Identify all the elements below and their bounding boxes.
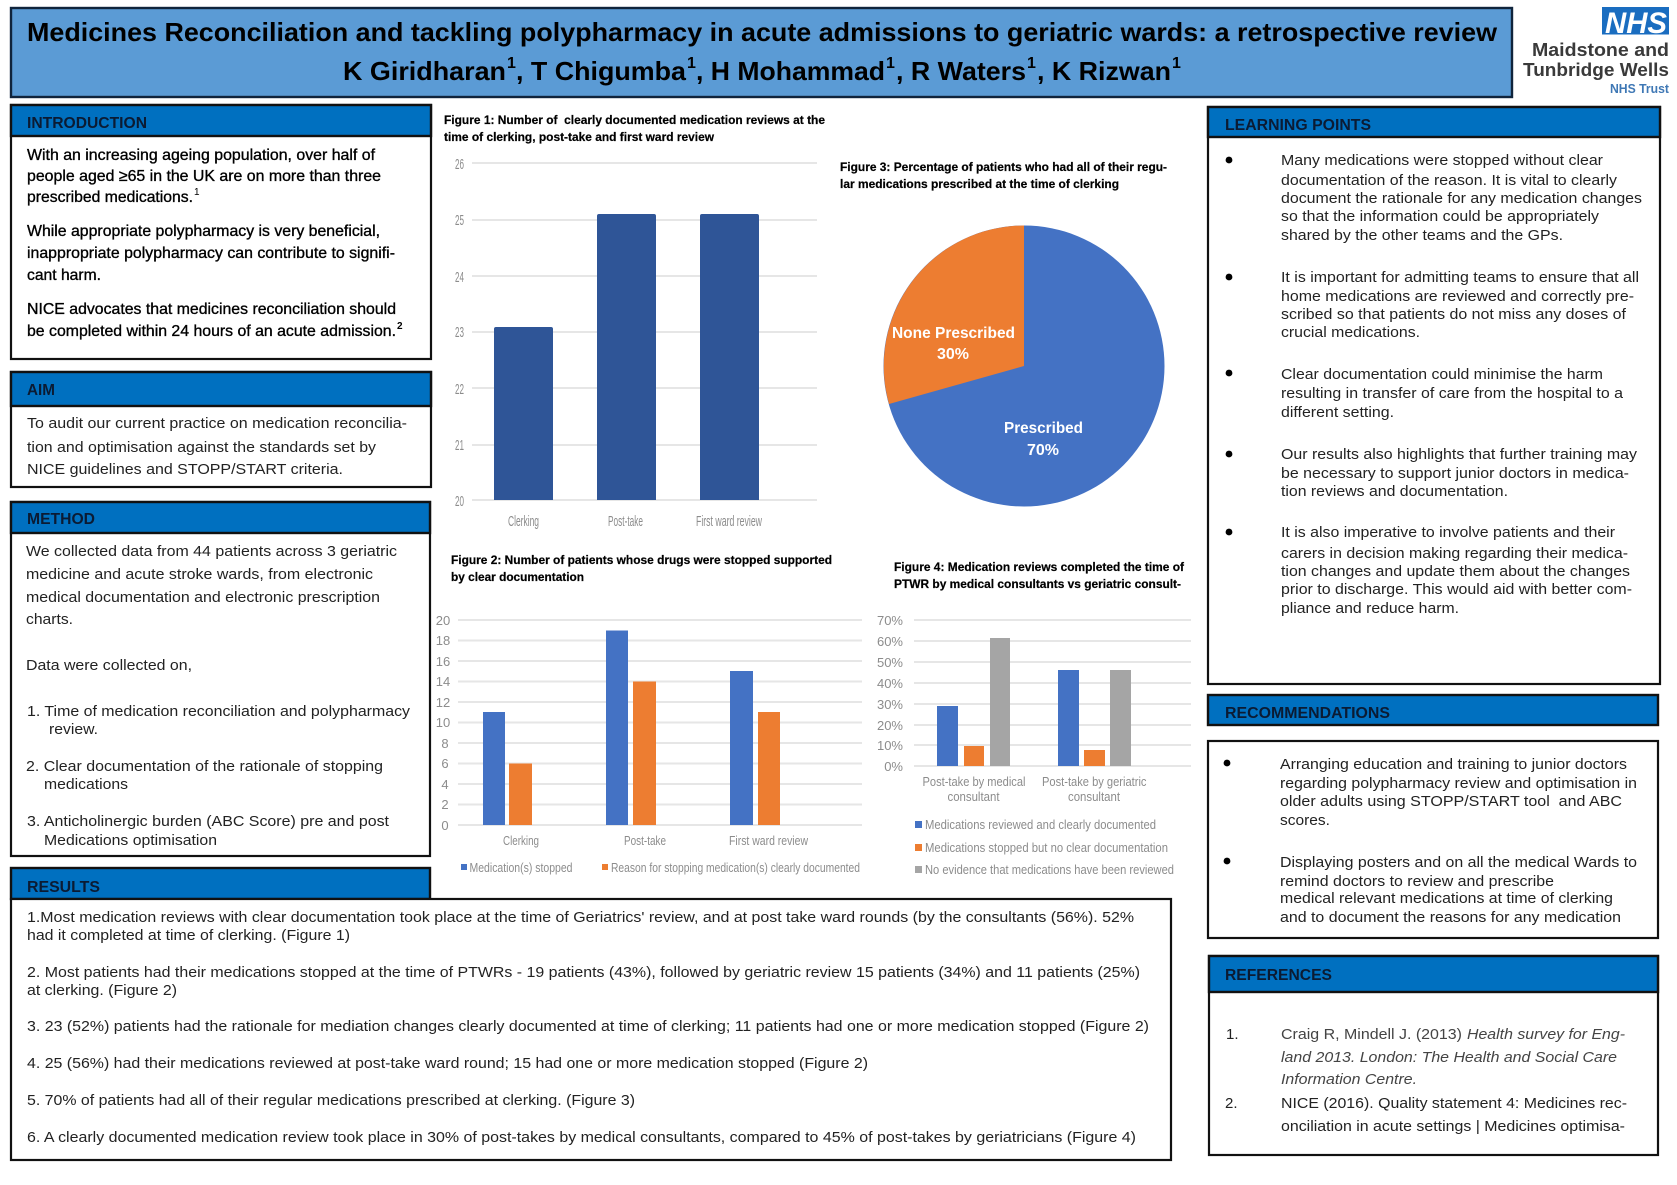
text block: method: 2. Clear documentation of the rationale of stopping: [26, 758, 383, 775]
heading: method: METHOD: [27, 511, 95, 528]
panel: recommendations: [1208, 741, 1658, 938]
legend: figure 2: Medication(s) stopped: [470, 860, 572, 875]
panel: results: [11, 868, 1171, 1160]
bar chart: figure 1: 25: [455, 212, 464, 229]
authors: 1: [687, 55, 696, 72]
text block: introduction: people aged ≥65 in the UK are on more than three: [27, 168, 381, 185]
bar chart: figure 2: 20: [436, 613, 450, 628]
pie chart: figure 3: [884, 226, 1164, 506]
text block: references: [1225, 1026, 1627, 1135]
bullet list: learning points: pliance and reduce harm.: [1281, 600, 1459, 617]
bar chart: figure 2: 14: [436, 674, 450, 689]
bar chart: figure 2: First ward review: [729, 833, 808, 848]
bullet list: learning points: prior to discharge. This would aid with better com-: [1281, 581, 1632, 598]
bar chart: figure 2: Post-take: [624, 833, 666, 848]
title: Medicines Reconciliation and tackling polypharmacy in acute admissions to geriatric wards: a retrospective review: [27, 17, 1498, 47]
bar chart: figure 2: Clerking: [503, 833, 539, 848]
bar chart: figure 2: 12: [436, 695, 450, 710]
bullet list: learning points: tion changes and update them about the changes: [1281, 563, 1630, 580]
bullet list: learning points: carers in decision making regarding their medica-: [1281, 545, 1628, 562]
text block: method: charts.: [26, 611, 73, 628]
text block: introduction: While appropriate polypharmacy is very beneficial,: [27, 223, 380, 240]
text block: method: medications: [44, 776, 128, 793]
bullet list: learning points: so that the information could be appropriately: [1281, 208, 1600, 225]
caption: figure 3: lar medications prescribed at the time of clerking: [840, 179, 1119, 191]
bar chart: figure 4: consultant: [1068, 789, 1120, 804]
heading: aim: AIM: [27, 382, 55, 399]
panel: recommendations: medical relevant medications at time of clerking: [1280, 890, 1613, 907]
panel: aim: [11, 372, 431, 487]
bar chart: figure 2: 4: [441, 777, 449, 792]
text block: references: onciliation in acute settings | Medicines optimisa-: [1281, 1118, 1625, 1135]
text block: introduction: With an increasing ageing population, over half of: [27, 147, 376, 164]
heading: introduction: INTRODUCTION: [27, 115, 147, 132]
bar chart: figure 4: Post-take by medical: [922, 774, 1026, 789]
bullet list: learning points: different setting.: [1281, 404, 1394, 421]
bullet list: learning points: documentation of the reason. It is vital to clearly: [1281, 172, 1618, 189]
text block: aim: [27, 415, 407, 478]
pie chart: figure 3: None Prescribed: [892, 325, 1015, 342]
caption: figure 1: Figure 1: Number of clearly documented medication reviews at the: [444, 115, 825, 127]
bar chart: figure 2: 0: [441, 818, 449, 833]
caption: figure 4: PTWR by medical consultants vs geriatric consult-: [894, 579, 1181, 591]
bullet list: learning points: It is important for admitting teams to ensure that all: [1281, 269, 1639, 286]
logo: NHS Maidstone and Tunbridge Wells NHS Trust: [1523, 7, 1670, 96]
text block: results: 4. 25 (56%) had their medications reviewed at post-take ward round; 15 had one or more medication stopped (Figure 2): [27, 1055, 868, 1072]
bullet list: learning points: shared by the other teams and the GPs.: [1281, 227, 1563, 244]
panel: figure 1: [444, 115, 825, 530]
bar chart: figure 4: 30%: [877, 697, 903, 712]
heading: references: REFERENCES: [1225, 967, 1332, 984]
bar chart: figure 4: 40%: [877, 676, 903, 691]
bullet list: learning points: It is also imperative to involve patients and their: [1281, 524, 1615, 541]
text block: results: 2. Most patients had their medications stopped at the time of PTWRs - 19 patients (43%), followed by geriatric review 15 patients (34%) and 11 patients (25%): [27, 964, 1140, 981]
text block: results: [27, 909, 1149, 1146]
authors: 1: [1027, 55, 1036, 72]
bar chart: figure 1: 23: [455, 324, 464, 341]
authors: 1: [507, 55, 516, 72]
bar chart: figure 2: 16: [436, 654, 450, 669]
caption: figure 4: Figure 4: Medication reviews completed the time of: [894, 562, 1184, 574]
text block: method: 3. Anticholinergic burden (ABC Score) pre and post: [27, 813, 390, 830]
text block: introduction: [27, 147, 403, 340]
bar chart: figure 2: 6: [441, 756, 449, 771]
panel: recommendations: older adults using STOPP/START tool and ABC: [1280, 793, 1622, 810]
bullet list: learning points: document the rationale for any medication changes: [1281, 190, 1642, 207]
panel: references: [1209, 956, 1658, 1155]
bullet list: learning points: [1226, 152, 1642, 617]
bar chart: figure 1: 26: [455, 156, 464, 173]
bar chart: figure 4: 20%: [877, 718, 903, 733]
bar chart: figure 1: Clerking: [508, 513, 539, 530]
bar chart: figure 4: consultant: [948, 789, 1000, 804]
text block: introduction: cant harm.: [27, 267, 101, 284]
pie chart: figure 3: Prescribed: [1004, 420, 1083, 437]
panel: figure 4: [877, 562, 1191, 877]
text block: introduction: prescribed medications.: [27, 189, 193, 206]
legend: figure 4: Medications stopped but no clear documentation: [925, 840, 1168, 855]
bar chart: figure 4: 10%: [877, 738, 903, 753]
text block: introduction: NICE advocates that medicines reconciliation should: [27, 301, 396, 318]
panel: recommendations: Arranging education and training to junior doctors: [1280, 756, 1627, 773]
text block: aim: To audit our current practice on medication reconcilia-: [27, 415, 407, 432]
panel: recommendations: Displaying posters and on all the medical Wards to: [1280, 854, 1637, 871]
text block: method: review.: [49, 721, 98, 738]
heading: results: RESULTS: [27, 879, 100, 896]
text block: results: 1.Most medication reviews with clear documentation took place at the time of Geriatrics' review, and at post take ward rounds (by the consultants (56%). 52%: [27, 909, 1134, 926]
text block: references: Craig R, Mindell J. (2013): [1281, 1026, 1462, 1043]
text block: references: Health survey for Eng-: [1467, 1026, 1625, 1043]
logo: NHS Maidstone and Tunbridge Wells NHS Trust: Maidstone and: [1532, 40, 1669, 60]
panel: recommendations: scores.: [1280, 812, 1330, 829]
caption: figure 4: [894, 562, 1184, 591]
panel: figure 2: [436, 555, 862, 875]
panel: recommendations heading: [1208, 695, 1658, 725]
logo: NHS Maidstone and Tunbridge Wells NHS Trust: NHS: [1605, 7, 1667, 40]
text block: references: 2.: [1225, 1095, 1238, 1112]
bar chart: figure 2: [436, 613, 862, 875]
bar chart: figure 2: 10: [436, 715, 450, 730]
bar chart: figure 4: 60%: [877, 634, 903, 649]
text block: results: 3. 23 (52%) patients had the rationale for mediation changes clearly documented at time of clerking; 11 patients had one or more medication stopped (Figure 2): [27, 1018, 1149, 1035]
heading: learning points: LEARNING POINTS: [1225, 117, 1371, 134]
caption: figure 2: Figure 2: Number of patients whose drugs were stopped supported: [451, 555, 832, 567]
authors: K Giridharan: [343, 56, 506, 86]
bar chart: figure 1: [455, 156, 817, 530]
bar chart: figure 4: 50%: [877, 655, 903, 670]
authors: , T Chigumba: [516, 56, 687, 86]
text block: results: 5. 70% of patients had all of their regular medications prescribed at clerking. (Figure 3): [27, 1092, 635, 1109]
bar chart: figure 2: 2: [441, 797, 449, 812]
authors: , H Mohammad: [696, 56, 885, 86]
bullet list: learning points: Many medications were stopped without clear: [1281, 152, 1603, 169]
caption: figure 1: time of clerking, post-take and first ward review: [444, 132, 714, 144]
bar chart: figure 1: 22: [455, 381, 464, 398]
authors: [343, 55, 1181, 86]
caption: figure 2: [451, 555, 832, 584]
bar chart: figure 1: 21: [455, 437, 464, 454]
text block: method: 1. Time of medication reconciliation and polypharmacy: [27, 703, 411, 720]
bullet list: learning points: scribed so that patients do not miss any doses of: [1281, 306, 1627, 323]
bullet list: learning points: Clear documentation could minimise the harm: [1281, 366, 1603, 383]
authors: , R Waters: [896, 56, 1026, 86]
text block: references: Information Centre.: [1281, 1071, 1417, 1088]
bar chart: figure 4: 0%: [884, 759, 903, 774]
logo: NHS Maidstone and Tunbridge Wells NHS Trust: Tunbridge Wells: [1523, 60, 1669, 80]
caption: figure 2: by clear documentation: [451, 572, 584, 584]
text block: introduction: inappropriate polypharmacy can contribute to signifi-: [27, 245, 395, 262]
bar chart: figure 4: 70%: [877, 613, 903, 628]
text block: references: 1.: [1226, 1026, 1239, 1043]
bullet list: learning points: home medications are reviewed and correctly pre-: [1281, 288, 1634, 305]
panel: introduction: [11, 105, 431, 359]
text block: results: had it completed at time of clerking. (Figure 1): [27, 927, 350, 944]
legend: figure 4: No evidence that medications have been reviewed: [925, 862, 1174, 877]
bar chart: figure 1: 24: [455, 269, 464, 286]
panel: method: [11, 502, 430, 856]
panel: recommendations: and to document the reasons for any medication: [1280, 909, 1621, 926]
logo: NHS Maidstone and Tunbridge Wells NHS Trust: NHS Trust: [1610, 82, 1670, 96]
caption: figure 1: [444, 115, 825, 144]
bullet list: learning points: crucial medications.: [1281, 324, 1420, 341]
text block: aim: NICE guidelines and STOPP/START criteria.: [27, 461, 343, 478]
text block: method: Medications optimisation: [44, 832, 217, 849]
authors: , K Rizwan: [1037, 56, 1171, 86]
text block: results: 6. A clearly documented medication review took place in 30% of post-takes by medical consultants, compared to 45% of post-takes by geriatricians (Figure 4): [27, 1129, 1136, 1146]
legend: figure 4: Medications reviewed and clearly documented: [925, 817, 1156, 832]
text block: introduction: be completed within 24 hours of an acute admission.: [27, 323, 396, 340]
pie chart: figure 3: 30%: [937, 346, 969, 363]
text block: results: at clerking. (Figure 2): [27, 982, 177, 999]
title banner: [11, 8, 1512, 97]
text block: aim: tion and optimisation against the standards set by: [27, 439, 377, 456]
caption: figure 3: Figure 3: Percentage of patients who had all of their regu-: [840, 162, 1167, 174]
text block: method: We collected data from 44 patients across 3 geriatric: [26, 543, 398, 560]
bar chart: figure 4: [877, 613, 1191, 877]
text block: method: medicine and acute stroke wards, from electronic: [26, 566, 374, 583]
text block: method: medical documentation and electronic prescription: [26, 589, 380, 606]
text block: introduction: 2: [397, 321, 403, 332]
authors: 1: [1172, 55, 1181, 72]
panel: recommendations: regarding polypharmacy review and optimisation in: [1280, 775, 1637, 792]
panel: recommendations: remind doctors to review and prescribe: [1280, 873, 1554, 890]
bar chart: figure 1: First ward review: [696, 513, 762, 530]
caption: figure 3: [840, 162, 1167, 191]
bullet list: learning points: resulting in transfer of care from the hospital to a: [1281, 385, 1624, 402]
panel: figure 3: [840, 162, 1167, 506]
bullet list: learning points: Our results also highlights that further training may: [1281, 446, 1638, 463]
legend: figure 4: [915, 817, 1174, 877]
panel: learning points: [1208, 107, 1660, 684]
panel: recommendations heading: RECOMMENDATIONS: [1225, 705, 1390, 722]
text block: references: land 2013. London: The Health and Social Care: [1281, 1049, 1617, 1066]
text block: method: Data were collected on,: [26, 657, 192, 674]
pie chart: figure 3: 70%: [1027, 442, 1059, 459]
authors: 1: [886, 55, 895, 72]
bar chart: figure 4: Post-take by geriatric: [1042, 774, 1147, 789]
bar chart: figure 2: 18: [436, 633, 450, 648]
bar chart: figure 2: 8: [441, 736, 449, 751]
text block: references: NICE (2016). Quality statement 4: Medicines rec-: [1281, 1095, 1627, 1112]
bar chart: figure 1: Post-take: [608, 513, 643, 530]
text block: method: [26, 543, 411, 849]
text block: introduction: 1: [194, 187, 200, 198]
legend: figure 2: Reason for stopping medication(s) clearly documented: [611, 860, 860, 875]
bullet list: learning points: be necessary to support junior doctors in medica-: [1281, 465, 1629, 482]
bar chart: figure 1: 20: [455, 493, 464, 510]
legend: figure 2: [461, 860, 860, 875]
bullet list: learning points: tion reviews and documentation.: [1281, 483, 1508, 500]
